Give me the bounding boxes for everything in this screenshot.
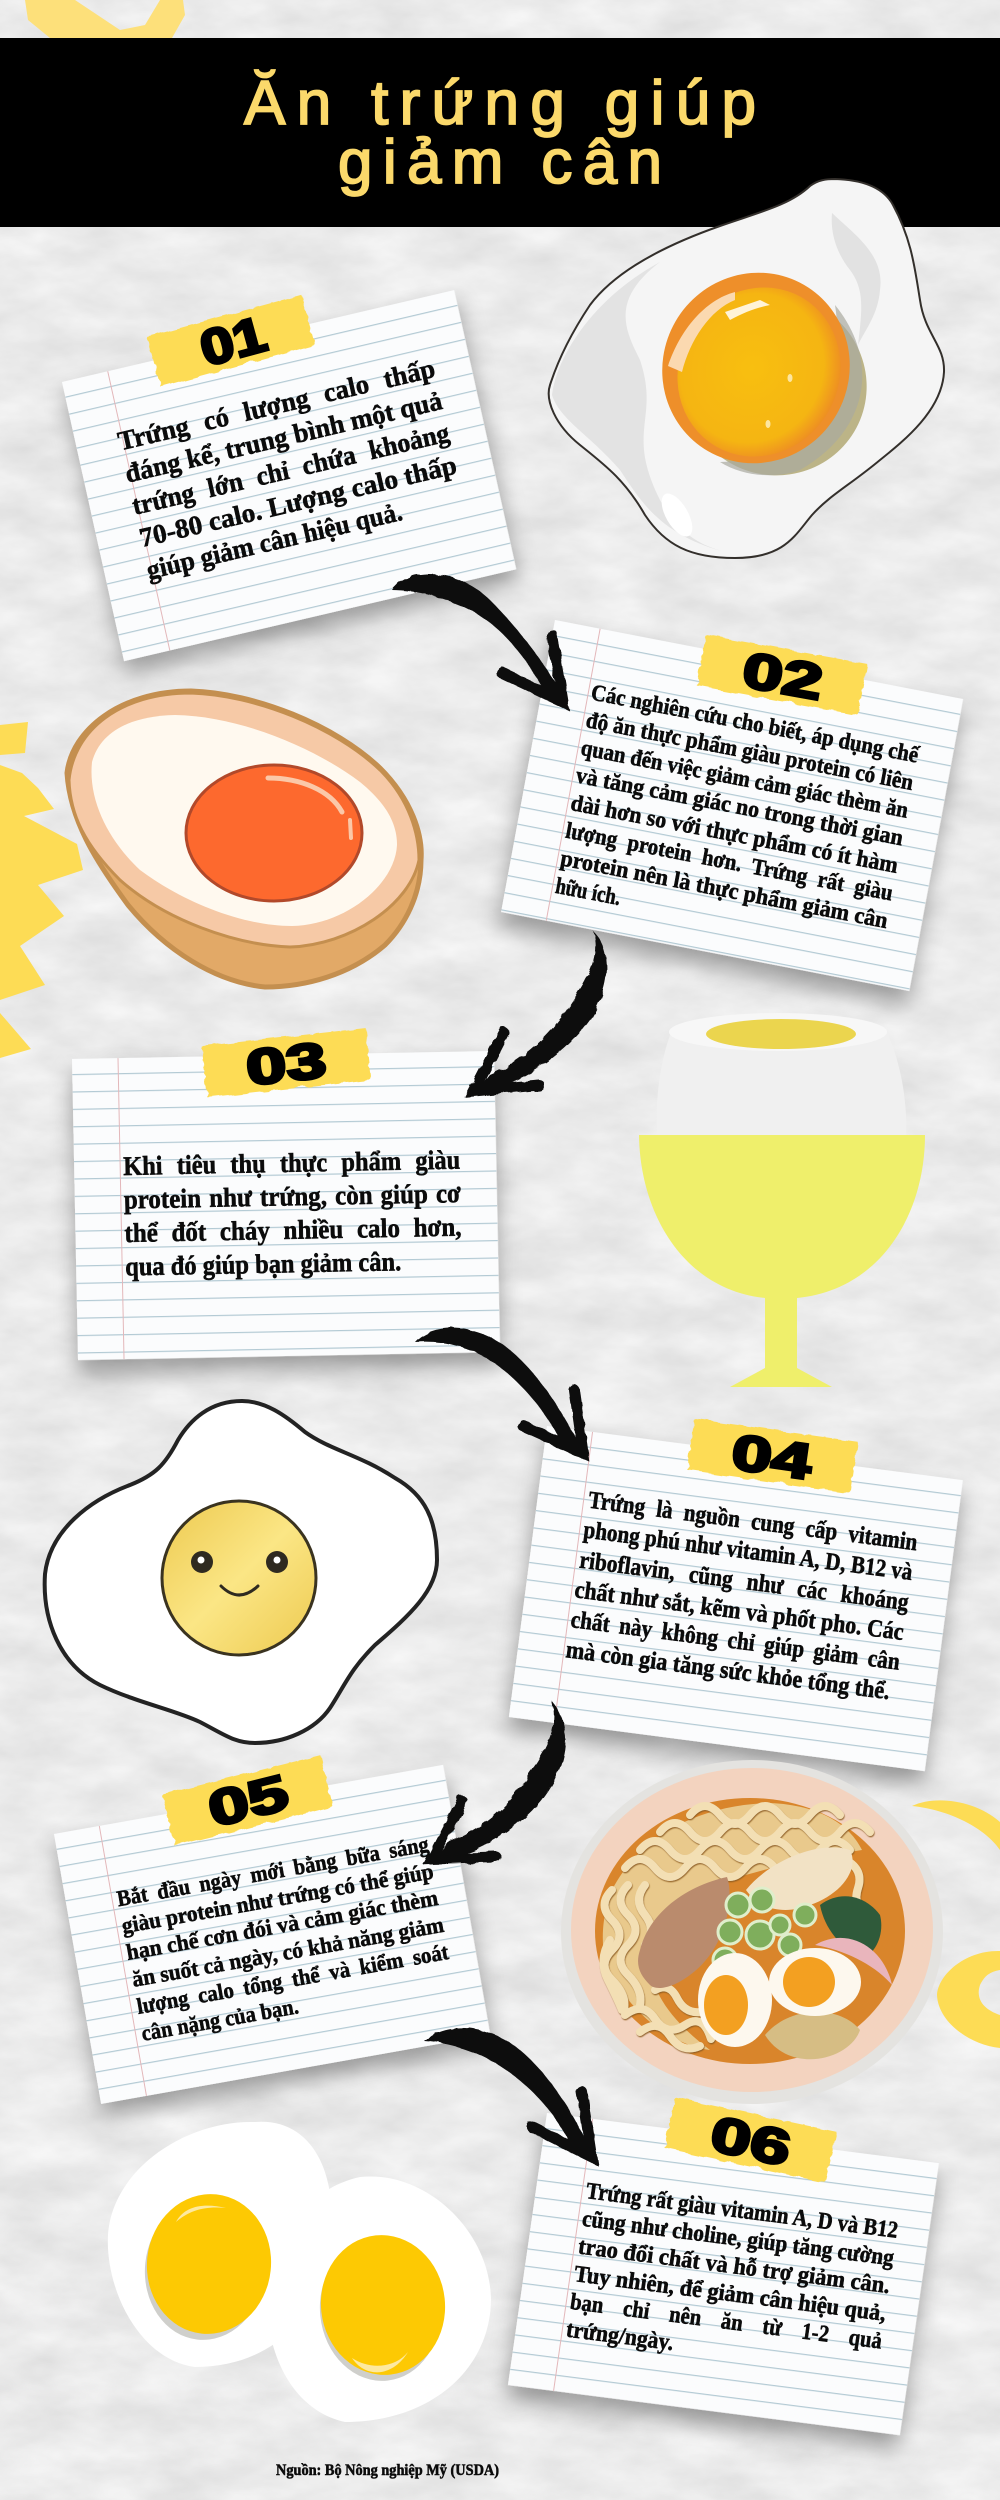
note 01 [62, 290, 516, 661]
tag 03: 03 [243, 1032, 329, 1096]
body text 05: giàu protein như trứng có thể giúp [120, 1858, 435, 1938]
source note: Nguồn: Bộ Nông nghiệp Mỹ (USDA) [276, 2462, 499, 2479]
halved egg left [698, 1953, 772, 2047]
title text [244, 69, 756, 197]
smiling yolk face [162, 1501, 316, 1655]
body text 04: chất này không chỉ giúp giảm cân [569, 1606, 902, 1676]
illustration: ramen bowl with eggs [561, 1760, 943, 2104]
body text 06: Tuy nhiên, để giảm cân hiệu quả, [573, 2261, 888, 2327]
tag 03 [202, 1027, 372, 1101]
paper sheet 03 [72, 1051, 500, 1360]
arrow 1 [392, 574, 568, 705]
body text 06: Trứng rất giàu vitamin A, D và B12 [584, 2178, 900, 2244]
note 05 [54, 1765, 490, 2104]
noodles [603, 1806, 870, 2048]
yellow brush strokes: right edge [912, 1800, 1000, 2048]
egg yolk [186, 765, 362, 901]
title text: Ăn trứng giúp [244, 69, 756, 138]
body text 03 [123, 1145, 463, 1282]
broth [595, 1798, 905, 2064]
tag 05 [162, 1754, 334, 1848]
arrow 4 [432, 1701, 566, 1862]
yellow brush stroke: top left [25, 0, 185, 38]
title banner [0, 38, 1000, 227]
body text 02: hữu ích. [554, 872, 623, 910]
body text 06: cũng như choline, giúp tăng cường [580, 2206, 896, 2272]
cup [639, 1135, 925, 1387]
yellow brush strokes: left edge [0, 722, 83, 1058]
illustration: two boiled egg halves [108, 2122, 491, 2422]
noodle bed [603, 1803, 862, 2050]
body text 02 [554, 679, 922, 961]
arrow 2 [474, 931, 607, 1095]
paper sheet 01 [62, 290, 516, 661]
paper sheet 04 [509, 1426, 963, 1771]
body text 06: trao đổi chất và hỗ trợ giảm cân. [577, 2234, 892, 2299]
tag 02 [696, 634, 867, 718]
body text 01: 70-80 calo. Lượng calo thấp [136, 450, 459, 553]
shredded cheese [746, 1847, 853, 1910]
illustration: boiled egg in yellow cup [639, 1013, 925, 1387]
cucumber slices [713, 1888, 816, 1972]
body text 05: Bắt đầu ngày mới bằng bữa sáng [115, 1831, 431, 1911]
body text 04: riboflavin, cũng như các khoáng [578, 1547, 910, 1616]
tag 02: 02 [738, 642, 827, 711]
body text 01: giúp giảm cân hiệu quả. [144, 496, 405, 585]
body text 04: chất như sắt, kẽm và phốt pho. Các [573, 1576, 905, 1646]
body text 01 [115, 353, 467, 585]
body text 04: Trứng là nguồn cung cấp vitamin [587, 1487, 919, 1556]
body text 05 [115, 1831, 456, 2046]
body text 03: Khi tiêu thụ thực phẩm giàu [123, 1145, 460, 1181]
body text 03: protein như trứng, còn giúp cơ [124, 1178, 461, 1215]
body text 06 [565, 2178, 900, 2382]
body text 02: và tăng cảm giác no trong thời gian [574, 761, 906, 850]
illustration: smiling fried egg [45, 1401, 437, 1743]
body text 02: lượng protein hơn. Trứng rất giàu [564, 817, 895, 906]
note 02 [501, 620, 963, 991]
body text 01: đáng kể, trung bình một quả [122, 385, 445, 489]
egg top opening [706, 1019, 856, 1049]
body text 02: độ ăn thực phẩm giàu protein có liên [584, 706, 916, 795]
note 06 [508, 2113, 939, 2435]
note 04 [509, 1426, 963, 1771]
illustration: halved tea egg [67, 691, 421, 987]
tag 04: 04 [728, 1424, 816, 1490]
body text 06: trứng/ngày. [565, 2317, 675, 2356]
body text 06: bạn chỉ nên ăn từ 1-2 quả [569, 2289, 884, 2355]
body text 05: lượng calo tổng thể và kiểm soát [135, 1939, 451, 2019]
body text 03: thể đốt cháy nhiều calo hơn, [124, 1212, 462, 1248]
body text 02: dài hơn so với thực phẩm có ít hàm [569, 789, 900, 878]
illustration: fried egg with glossy yolk [549, 179, 944, 558]
body text 02: Các nghiên cứu cho biết, áp dụng chế [589, 679, 922, 768]
body text 02: protein nên là thực phẩm giảm cân [559, 844, 890, 933]
paper sheet 02 [501, 620, 963, 991]
tag 01: 01 [194, 306, 272, 377]
paper sheet 05 [54, 1765, 490, 2104]
red onion [815, 1938, 892, 1985]
pork slice [638, 1877, 730, 1988]
dumpling [765, 2012, 860, 2059]
body text 04: phong phú như vitamin A, D, B12 và [582, 1516, 914, 1586]
tag 06: 06 [706, 2105, 796, 2177]
body text 05: cân nặng của bạn. [140, 1993, 300, 2046]
note 03 [72, 1051, 500, 1360]
body text 04 [564, 1486, 919, 1706]
body text 05: hạn chế cơn đói và cảm giác thèm [124, 1885, 440, 1965]
tag 01 [147, 294, 316, 390]
paper sheet 06 [508, 2113, 939, 2435]
spinach [820, 1896, 881, 1960]
left egg half [108, 2122, 332, 2367]
tag 05: 05 [203, 1764, 294, 1838]
title text: giảm cân [338, 128, 662, 197]
body text 03: qua đó giúp bạn giảm cân. [125, 1246, 401, 1282]
body text 01: Trứng có lượng calo thấp [115, 353, 438, 456]
tag 04 [687, 1418, 858, 1496]
body text 01: trứng lớn chỉ chứa khoảng [129, 417, 453, 521]
body text 02: quan đến việc giảm cảm giác thèm ăn [579, 734, 911, 823]
halved egg right [769, 1948, 861, 2016]
arrow 3 [415, 1328, 585, 1456]
arrow 5 [424, 2028, 594, 2158]
tag 06 [664, 2097, 837, 2186]
right egg half [268, 2176, 491, 2422]
body text 04: mà còn gia tăng sức khỏe tổng thể. [564, 1636, 892, 1705]
body text 05: ăn suốt cả ngày, có khả năng giảm [130, 1912, 446, 1992]
